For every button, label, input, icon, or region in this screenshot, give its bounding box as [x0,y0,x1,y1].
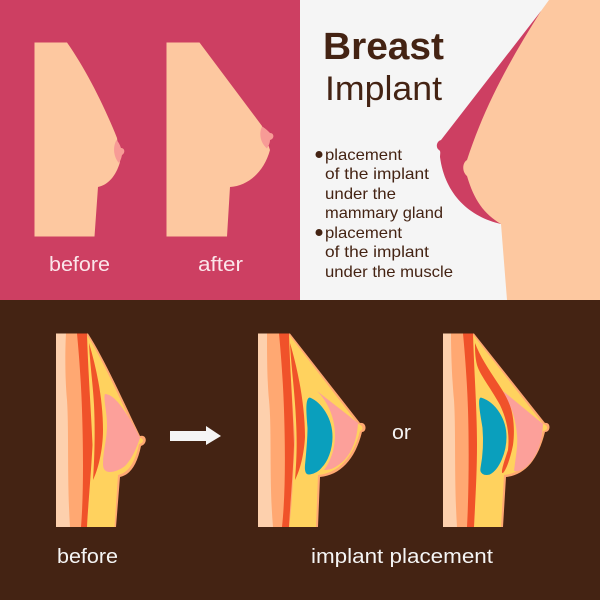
label: implant placement: implant placement [311,546,493,568]
diagram: implant under the muscle [443,334,550,527]
panel: title and description [300,0,600,300]
list item: under the muscle: under the muscle [325,264,453,281]
title: Breast: Breast [323,26,444,68]
panel: anatomy diagrams [0,300,600,600]
list item: under the mammary gland: placement [325,147,403,164]
arrow [170,426,221,445]
side profile illustration [437,0,600,300]
list item: under the mammary gland: under the [325,186,396,203]
diagram: implant under the gland [258,334,366,527]
label: before: before [57,546,118,568]
title: Implant: Implant [325,70,443,108]
label: before: before [49,254,110,276]
panel: before and after silhouettes [0,0,300,300]
diagram: before [56,334,146,527]
list item: under the mammary gland: of the implant [325,166,430,183]
list item: under the muscle: placement [325,225,403,242]
list item: under the muscle [316,225,453,281]
list item: under the mammary gland: mammary gland [325,205,443,222]
silhouette: before [34,42,124,236]
label: or: or [392,422,411,444]
list item: under the mammary gland [316,147,443,222]
silhouette: after [166,42,273,236]
list item: under the muscle: of the implant [325,244,430,261]
label: after: after [198,254,243,276]
